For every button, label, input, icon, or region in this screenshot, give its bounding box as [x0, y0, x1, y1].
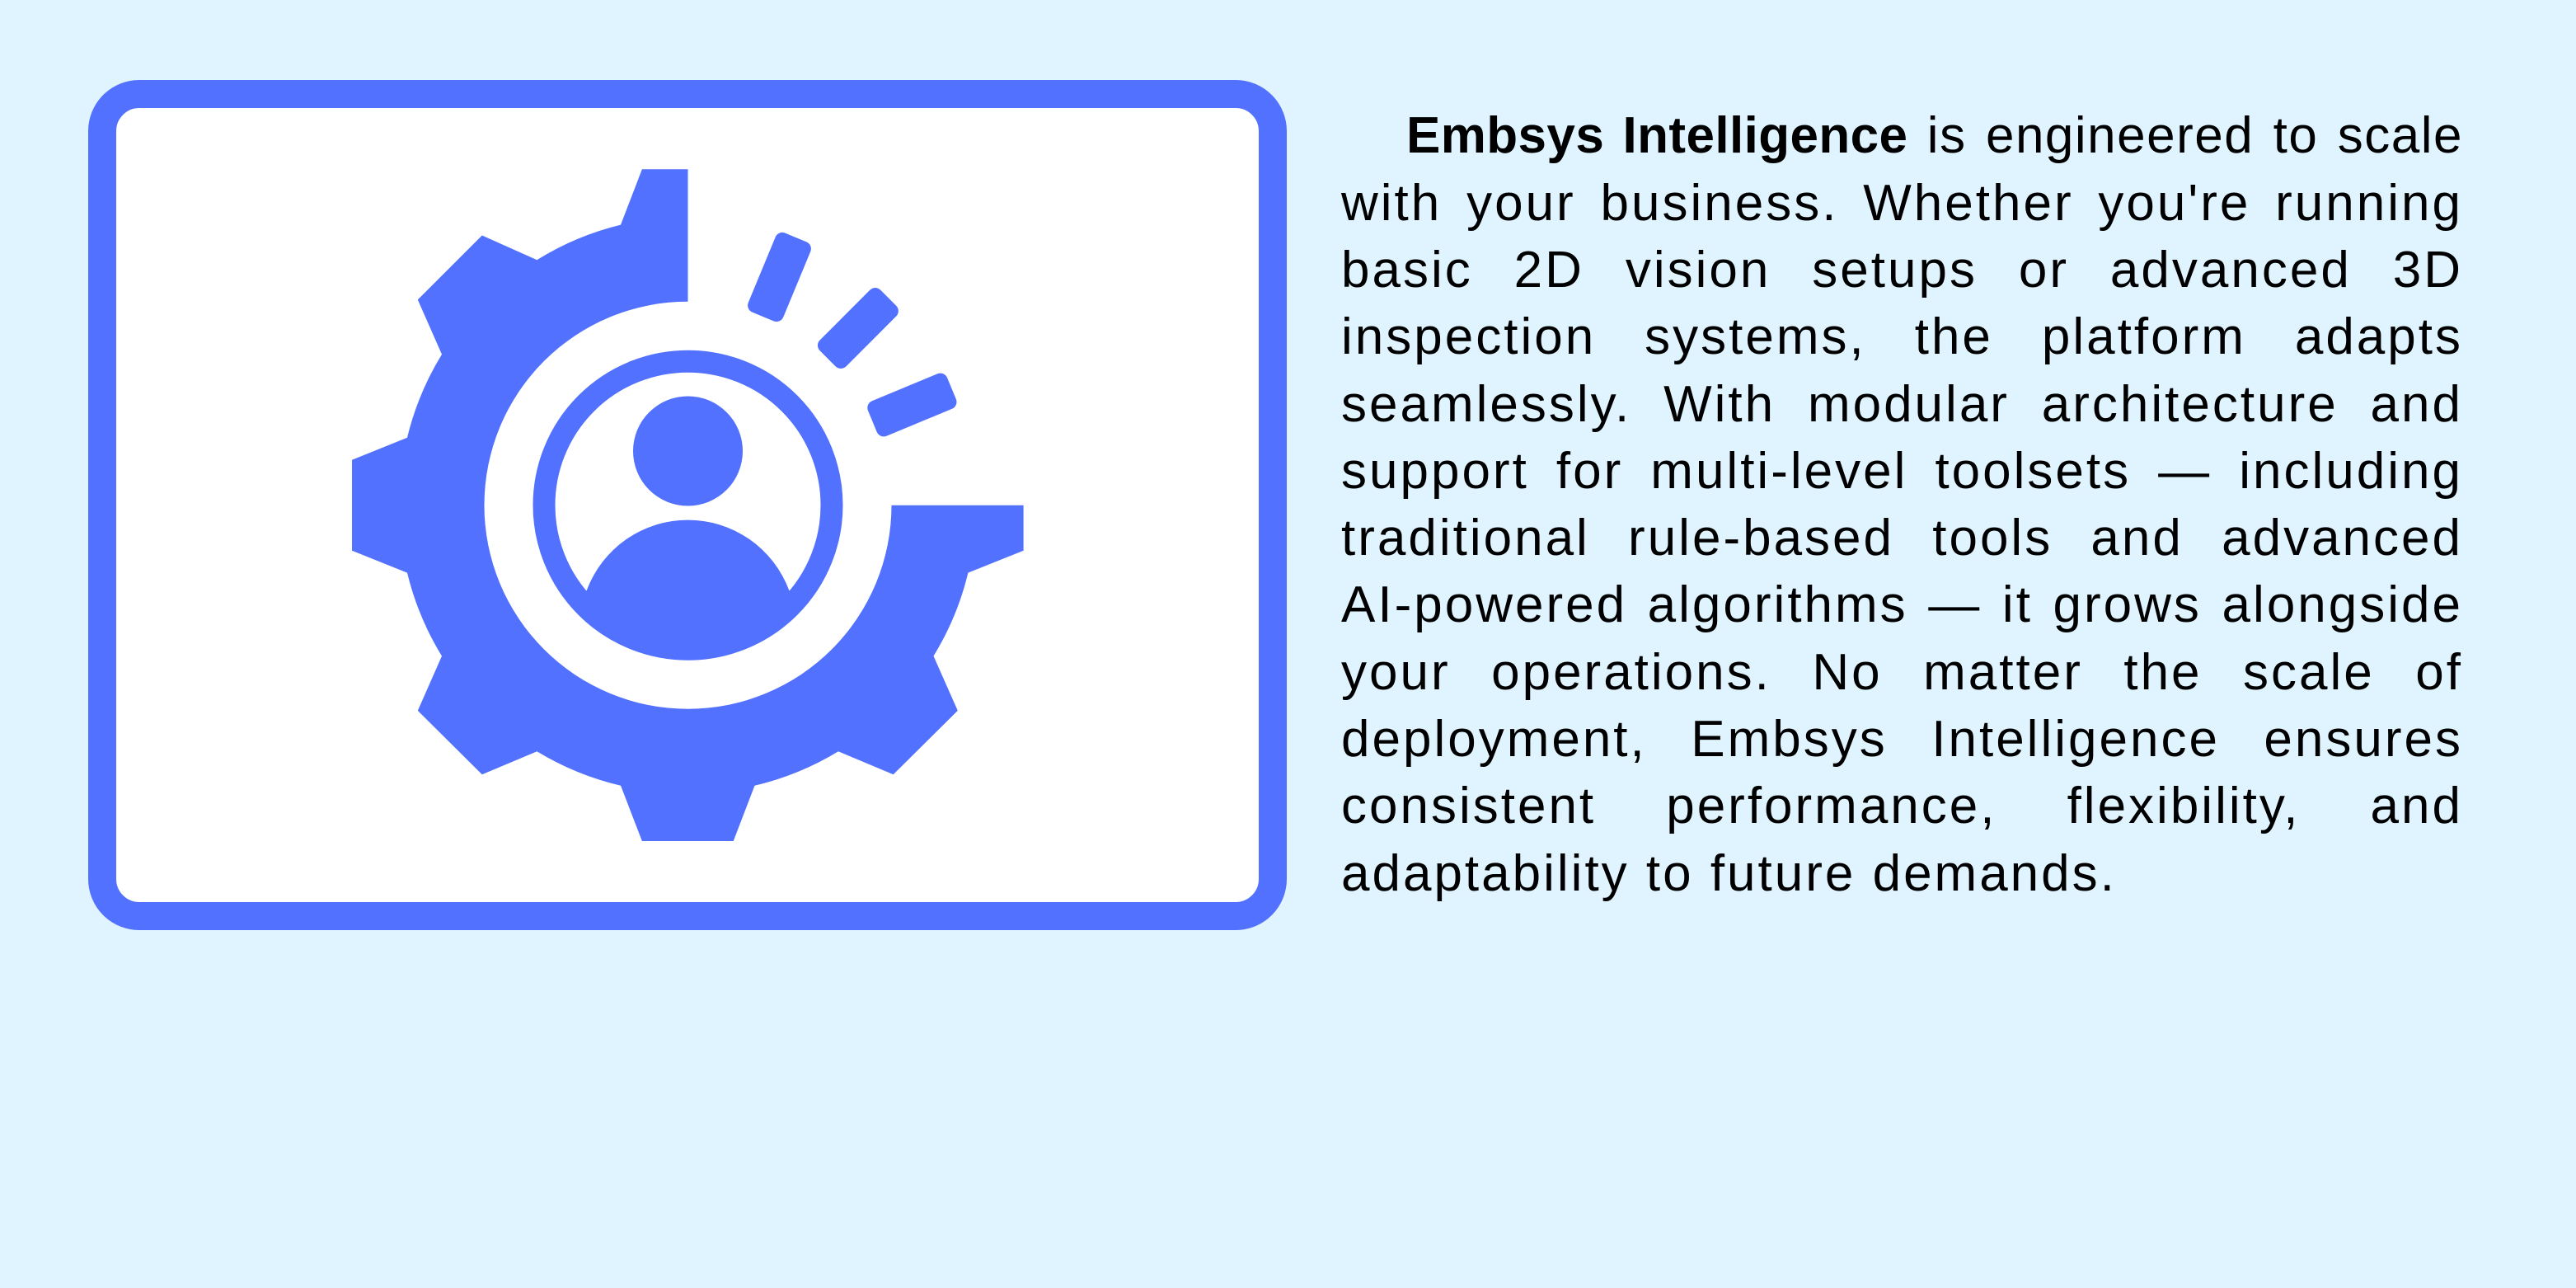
text block: description: traditional rule-based tools and advanced — [1341, 510, 2463, 566]
icon: ray three — [866, 371, 959, 439]
icon: ray one — [745, 230, 814, 324]
text block: description: your operations. No matter the scale of — [1341, 644, 2463, 701]
panel: icon frame — [88, 80, 1287, 930]
icon: person ring — [544, 361, 832, 649]
text block: description: consistent performance, flexibility, and — [1341, 778, 2463, 834]
text block: description: with your business. Whether you're running — [1341, 175, 2463, 232]
icon: person body — [576, 520, 800, 653]
text block: description: Embsys Intelligence is engineered to scale — [1406, 107, 2463, 164]
text block: description: deployment, Embsys Intelligence ensures — [1341, 711, 2463, 768]
text block: description: seamlessly. With modular architecture and — [1341, 376, 2463, 433]
text block: description: inspection systems, the platform adapts — [1341, 308, 2463, 365]
icon: ray two — [814, 284, 902, 372]
icon: open gear — [352, 169, 1024, 841]
icon: person head — [633, 396, 743, 506]
text block: description: support for multi-level toolsets — including — [1341, 443, 2463, 500]
text block: description: basic 2D vision setups or advanced 3D — [1341, 242, 2463, 298]
text block: description — [1340, 107, 2463, 902]
text block: description: AI-powered algorithms — it grows alongside — [1341, 576, 2463, 633]
text block: description: adaptability to future demands. — [1341, 845, 2117, 902]
